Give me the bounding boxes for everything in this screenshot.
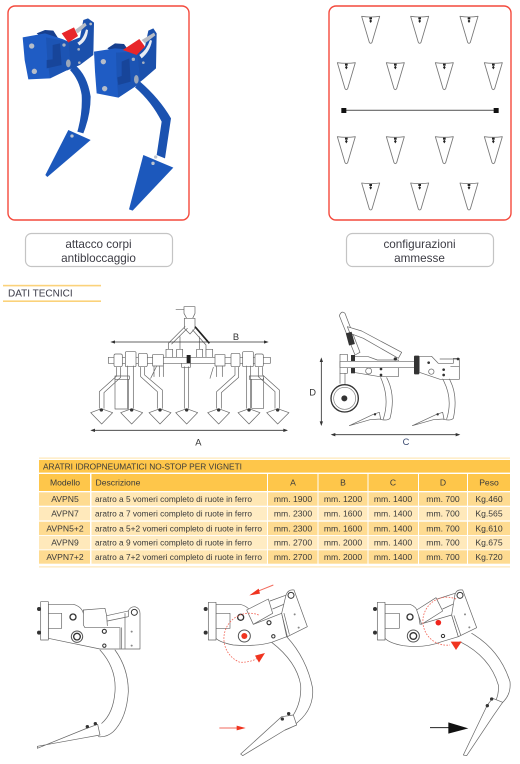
table row AVPN7+2: AVPN7+2 <box>46 552 84 562</box>
table row AVPN7+2: Kg.720 <box>475 552 503 562</box>
table row AVPN5+2: mm. 1600 <box>324 523 362 533</box>
table header row: D <box>440 478 446 488</box>
table header row: B <box>340 478 346 488</box>
diagram: side view with dimensions C and D: D <box>309 388 316 398</box>
table row AVPN7 <box>39 507 510 520</box>
table row AVPN5+2 <box>39 522 510 535</box>
table row AVPN9: aratro a 9 vomeri completo di ruote in ferro <box>95 538 252 548</box>
table row AVPN5+2: mm. 1400 <box>374 523 412 533</box>
table: technical data <box>39 458 510 567</box>
table row AVPN7+2: mm. 1400 <box>374 552 412 562</box>
table row AVPN5: mm. 1400 <box>374 494 412 504</box>
caption: configurazioni ammesse: ammesse <box>394 252 445 265</box>
table row AVPN7+2: mm. 2000 <box>324 552 362 562</box>
table row AVPN7+2: mm. 2700 <box>274 552 312 562</box>
table row AVPN5+2: AVPN5+2 <box>46 523 84 533</box>
table header row: A <box>290 478 296 488</box>
caption: attacco corpi antibloccaggio: attacco corpi <box>65 238 132 251</box>
table row AVPN9: mm. 700 <box>426 538 460 548</box>
diagram: side view with dimensions C and D: C <box>403 437 410 447</box>
table header row: Modello <box>50 478 80 488</box>
heading: dati tecnici: DATI TECNICI <box>8 288 73 300</box>
caption: attacco corpi antibloccaggio: antibloccaggio <box>61 252 136 265</box>
diagram: plough body at rest <box>37 602 140 748</box>
table row AVPN5: aratro a 5 vomeri completo di ruote in ferro <box>95 494 252 504</box>
table row AVPN5+2: Kg.610 <box>475 523 503 533</box>
caption: configurazioni ammesse: configurazioni <box>383 238 456 251</box>
caption: attacco corpi antibloccaggio <box>26 234 172 266</box>
table row AVPN9 <box>39 536 510 549</box>
diagram: front view with dimensions A and B: A <box>195 437 202 447</box>
diagram: side view with dimensions C and D <box>309 312 460 447</box>
table row AVPN7: mm. 2300 <box>274 509 312 519</box>
table row AVPN5+2: mm. 700 <box>426 523 460 533</box>
table row AVPN5: AVPN5 <box>51 494 79 504</box>
table row AVPN9: Kg.675 <box>475 538 503 548</box>
table row AVPN7: mm. 1600 <box>324 509 362 519</box>
heading: dati tecnici <box>3 285 101 302</box>
table title band <box>39 460 510 473</box>
table row AVPN9: mm. 2700 <box>274 538 312 548</box>
panel: allowed configurations <box>329 6 511 220</box>
table header row: Descrizione <box>96 478 141 488</box>
table row AVPN7: AVPN7 <box>51 509 79 519</box>
table header row <box>39 474 510 491</box>
table row AVPN5: mm. 700 <box>426 494 460 504</box>
diagram: plough body tripping with red arrows <box>204 585 313 756</box>
diagram: plough body fully deflected with black arrow <box>373 590 510 756</box>
table row AVPN9: mm. 1400 <box>374 538 412 548</box>
table row AVPN7: mm. 1400 <box>374 509 412 519</box>
table row AVPN7+2: aratro a 7+2 vomeri completo di ruote in ferro <box>95 552 262 562</box>
table row AVPN7: Kg.565 <box>475 509 503 519</box>
table title band: ARATRI IDROPNEUMATICI NO-STOP PER VIGNETI <box>43 462 242 472</box>
table row AVPN5: mm. 1900 <box>274 494 312 504</box>
table row AVPN7+2 <box>39 550 510 564</box>
table row AVPN5: Kg.460 <box>475 494 503 504</box>
table row AVPN9: mm. 2000 <box>324 538 362 548</box>
table row AVPN5: mm. 1200 <box>324 494 362 504</box>
diagram: front view with dimensions A and B <box>90 307 289 447</box>
table header row: C <box>390 478 396 488</box>
diagram: front view with dimensions A and B: B <box>233 332 239 342</box>
table row AVPN9: AVPN9 <box>51 538 79 548</box>
caption: configurazioni ammesse <box>346 234 494 266</box>
icon: blue plough bodies <box>23 18 173 211</box>
table header row: Peso <box>479 478 499 488</box>
table row AVPN7: mm. 700 <box>426 509 460 519</box>
panel: anti-blockage coupling photo <box>8 6 189 220</box>
table row AVPN5+2: mm. 2300 <box>274 523 312 533</box>
table row AVPN5 <box>39 492 510 506</box>
table row AVPN7+2: mm. 700 <box>426 552 460 562</box>
table row AVPN5+2: aratro a 5+2 vomeri completo di ruote in ferro <box>95 523 262 533</box>
table row AVPN7: aratro a 7 vomeri completo di ruote in ferro <box>95 509 252 519</box>
